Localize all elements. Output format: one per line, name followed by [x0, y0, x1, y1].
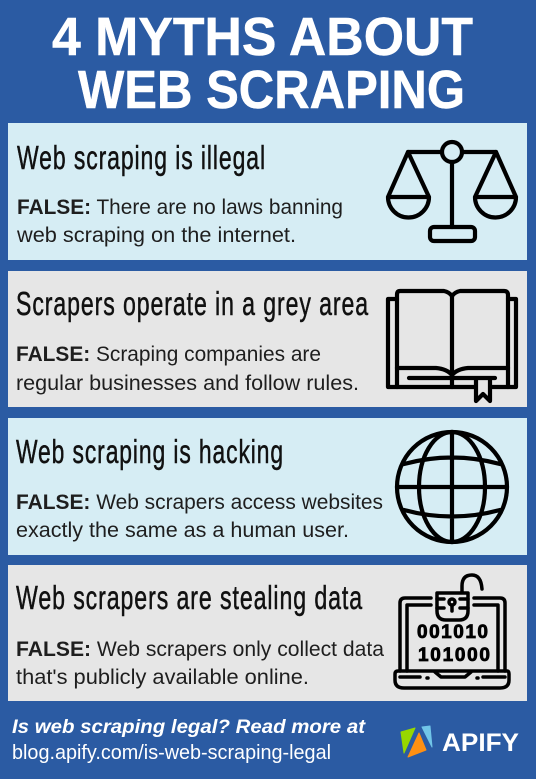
text: myth 2 body: regular businesses and follow rules.	[16, 371, 359, 395]
title: WEB SCRAPING	[78, 60, 465, 120]
text: myth 1 body	[16, 195, 343, 247]
text: myth 4 body	[16, 637, 384, 689]
panel: myth 2 grey area	[8, 271, 527, 407]
text: myth 3 body: FALSE: Web scrapers access websites	[16, 490, 383, 514]
text: myth 2 body	[16, 342, 359, 395]
text: myth 2 body: FALSE: Scraping companies are	[16, 342, 321, 366]
footer call to action: blog.apify.com/is-web-scraping-legal	[12, 742, 331, 764]
icon: laptop with binary and open padlock	[395, 575, 509, 688]
panel: myth 4 stealing data	[8, 565, 527, 701]
heading: myth 2: Scrapers operate in a grey area	[16, 285, 369, 322]
text: myth 4 body: FALSE: Web scrapers only collect data	[16, 637, 384, 661]
title	[52, 7, 473, 120]
panel: myth 3 hacking	[8, 418, 527, 555]
text: myth 1 body: FALSE: There are no laws banning	[17, 195, 343, 219]
panel: myth 1 illegal	[8, 123, 527, 260]
logo: Apify: APIFY	[442, 729, 519, 757]
icon: open book	[388, 291, 516, 401]
icon: globe	[397, 432, 507, 542]
text: myth 3 body: exactly the same as a human user.	[16, 518, 349, 542]
icon: laptop with binary and open padlock: 001010	[417, 622, 488, 643]
footer call to action	[12, 716, 367, 764]
heading: myth 1: Web scraping is illegal	[17, 139, 266, 176]
text: myth 1 body: web scraping on the internet.	[16, 223, 296, 247]
logo: Apify	[401, 726, 519, 757]
title: 4 MYTHS ABOUT	[52, 7, 473, 67]
text: myth 3 body	[16, 490, 383, 542]
icon: scales of justice	[388, 142, 516, 241]
icon: laptop with binary and open padlock: 101000	[418, 645, 490, 666]
text: myth 4 body: that's publicly available online.	[16, 665, 309, 689]
heading: myth 3: Web scraping is hacking	[16, 433, 284, 470]
footer call to action: Is web scraping legal? Read more at	[12, 716, 367, 738]
heading: myth 4: Web scrapers are stealing data	[16, 579, 363, 616]
